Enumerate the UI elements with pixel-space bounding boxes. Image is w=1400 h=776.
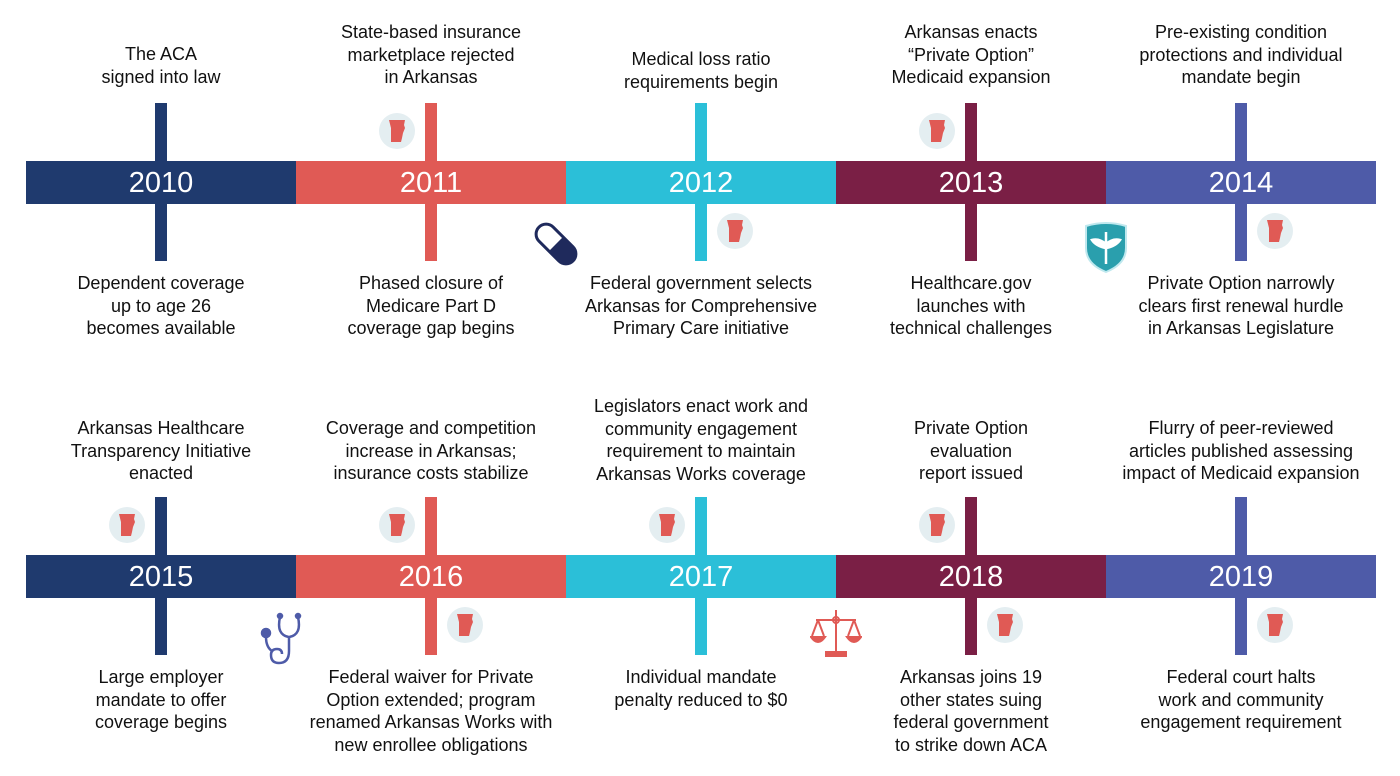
text 2010 top: signed into law: [101, 66, 221, 86]
text 2019 bottom: work and community: [1158, 690, 1324, 710]
text 2016 bottom: Option extended; program: [326, 690, 536, 710]
text 2013 top: “Private Option”: [908, 44, 1034, 64]
icon: arkansas 2015: [109, 507, 145, 543]
text 2015 top: Arkansas Healthcare: [77, 418, 245, 438]
text 2018 bottom: to strike down ACA: [895, 734, 1047, 754]
text 2019 top: impact of Medicaid expansion: [1122, 463, 1360, 483]
text 2010 bottom: up to age 26: [111, 296, 211, 316]
text 2011 top: marketplace rejected: [347, 44, 515, 64]
text 2011 top: [341, 22, 521, 87]
text 2017 bottom: [614, 667, 788, 710]
text 2019 top: articles published assessing: [1129, 440, 1353, 460]
icon: arkansas 2016 top: [379, 507, 415, 543]
text 2011 top: State-based insurance: [341, 22, 521, 42]
year bar 2013: [836, 161, 1106, 204]
text 2014 bottom: clears first renewal hurdle: [1138, 296, 1344, 316]
year bar 2015: 2015: [129, 561, 193, 593]
text 2018 bottom: Arkansas joins 19: [900, 667, 1042, 687]
text 2012 top: requirements begin: [624, 72, 778, 92]
text 2015 bottom: [95, 667, 227, 732]
text 2017 top: requirement to maintain: [606, 441, 796, 461]
year bar 2019: 2019: [1209, 561, 1273, 593]
text 2012 bottom: Arkansas for Comprehensive: [585, 296, 817, 316]
icon: arkansas 2014: [1257, 213, 1293, 249]
text 2014 bottom: in Arkansas Legislature: [1148, 318, 1334, 338]
text 2017 top: Legislators enact work and: [594, 396, 808, 416]
text 2015 top: [71, 418, 251, 483]
text 2016 top: Coverage and competition: [326, 418, 536, 438]
text 2010 bottom: becomes available: [86, 318, 236, 338]
text 2018 bottom: [893, 667, 1049, 754]
text 2010 top: The ACA: [125, 44, 197, 64]
text 2019 bottom: Federal court halts: [1166, 667, 1316, 687]
icon: arkansas 2016 bottom: [447, 607, 483, 643]
text 2011 bottom: [347, 273, 515, 338]
text 2012 bottom: Federal government selects: [590, 273, 812, 293]
icon: arkansas 2013: [919, 113, 955, 149]
timeline row 2: [26, 396, 1376, 755]
text 2017 bottom: penalty reduced to $0: [614, 690, 788, 710]
text 2018 top: evaluation: [930, 440, 1012, 460]
text 2014 top: mandate begin: [1181, 67, 1301, 87]
text 2011 bottom: Medicare Part D: [366, 296, 496, 316]
year bar 2010: 2010: [129, 167, 193, 199]
text 2016 bottom: new enrollee obligations: [334, 734, 528, 754]
year bar 2014: [1106, 161, 1376, 204]
text 2015 bottom: mandate to offer: [96, 690, 226, 710]
text 2014 top: [1139, 22, 1343, 87]
text 2018 top: report issued: [919, 463, 1023, 483]
text 2019 bottom: engagement requirement: [1140, 712, 1342, 732]
text 2013 top: Arkansas enacts: [904, 22, 1038, 42]
text 2016 bottom: [310, 667, 552, 755]
year bar 2018: [836, 555, 1106, 598]
text 2015 top: Transparency Initiative: [71, 440, 251, 460]
year bar 2018: 2018: [939, 561, 1003, 593]
icon: arkansas 2019: [1257, 607, 1293, 643]
text 2019 top: Flurry of peer-reviewed: [1148, 418, 1334, 438]
text 2014 bottom: Private Option narrowly: [1147, 273, 1335, 293]
text 2018 top: [914, 418, 1028, 483]
text 2018 bottom: federal government: [893, 712, 1049, 732]
icon: arkansas 2018 top: [919, 507, 955, 543]
year bar 2016: [296, 555, 566, 598]
text 2015 top: enacted: [129, 463, 193, 483]
icon: scales of justice: [810, 610, 862, 657]
year bar 2017: [566, 555, 836, 598]
text 2016 top: [326, 418, 536, 483]
text 2012 bottom: Primary Care initiative: [613, 318, 789, 338]
text 2016 bottom: renamed Arkansas Works with: [310, 712, 552, 732]
year bar 2019: [1106, 555, 1376, 598]
icon: medical shield: [1085, 222, 1127, 273]
text 2018 top: Private Option: [914, 418, 1028, 438]
text 2012 top: Medical loss ratio: [631, 49, 771, 69]
year bar 2012: [566, 161, 836, 204]
year bar 2016: 2016: [399, 561, 463, 593]
year bar 2010: [26, 161, 296, 204]
text 2017 top: Arkansas Works coverage: [596, 464, 806, 484]
text 2013 top: Medicaid expansion: [891, 67, 1051, 87]
text 2017 top: community engagement: [605, 418, 797, 438]
text 2011 top: in Arkansas: [384, 67, 478, 87]
text 2018 bottom: other states suing: [900, 690, 1042, 710]
text 2019 bottom: [1140, 667, 1342, 732]
year bar 2013: 2013: [939, 167, 1003, 199]
year bar 2015: [26, 555, 296, 598]
icon: arkansas 2011: [379, 113, 415, 149]
text 2010 bottom: [77, 273, 245, 338]
vertical ticks row 2: [155, 497, 1247, 655]
text 2013 bottom: Healthcare.gov: [910, 273, 1032, 293]
text 2010 top: [101, 44, 221, 87]
year bar 2011: 2011: [400, 167, 462, 199]
text 2017 top: [594, 396, 808, 484]
text 2014 top: Pre-existing condition: [1155, 22, 1327, 42]
vertical ticks row 1: [155, 103, 1247, 261]
icon: arkansas 2017: [649, 507, 685, 543]
icon: stethoscope: [260, 612, 302, 664]
text 2016 top: insurance costs stabilize: [333, 463, 529, 483]
text 2015 bottom: Large employer: [98, 667, 224, 687]
text 2013 bottom: launches with: [916, 296, 1026, 316]
timeline row 1: [26, 22, 1376, 338]
year bar 2014: 2014: [1209, 167, 1273, 199]
icon: arkansas 2018 bottom: [987, 607, 1023, 643]
text 2016 top: increase in Arkansas;: [345, 440, 517, 460]
text 2017 bottom: Individual mandate: [625, 667, 777, 687]
text 2014 bottom: [1138, 273, 1344, 338]
text 2010 bottom: Dependent coverage: [77, 273, 245, 293]
text 2014 top: protections and individual: [1139, 44, 1343, 64]
text 2013 bottom: [890, 273, 1052, 338]
text 2019 top: [1122, 418, 1360, 483]
icon: pill: [534, 222, 578, 266]
year bar 2012: 2012: [669, 167, 733, 199]
year bar 2011: [296, 161, 566, 204]
text 2012 top: [624, 49, 778, 92]
text 2011 bottom: Phased closure of: [359, 273, 503, 293]
text 2015 bottom: coverage begins: [95, 712, 227, 732]
text 2012 bottom: [585, 273, 817, 338]
text 2011 bottom: coverage gap begins: [347, 318, 515, 338]
text 2016 bottom: Federal waiver for Private: [328, 667, 534, 687]
text 2013 top: [891, 22, 1051, 87]
year bar 2017: 2017: [669, 561, 733, 593]
text 2013 bottom: technical challenges: [890, 318, 1052, 338]
icon: arkansas 2012: [717, 213, 753, 249]
